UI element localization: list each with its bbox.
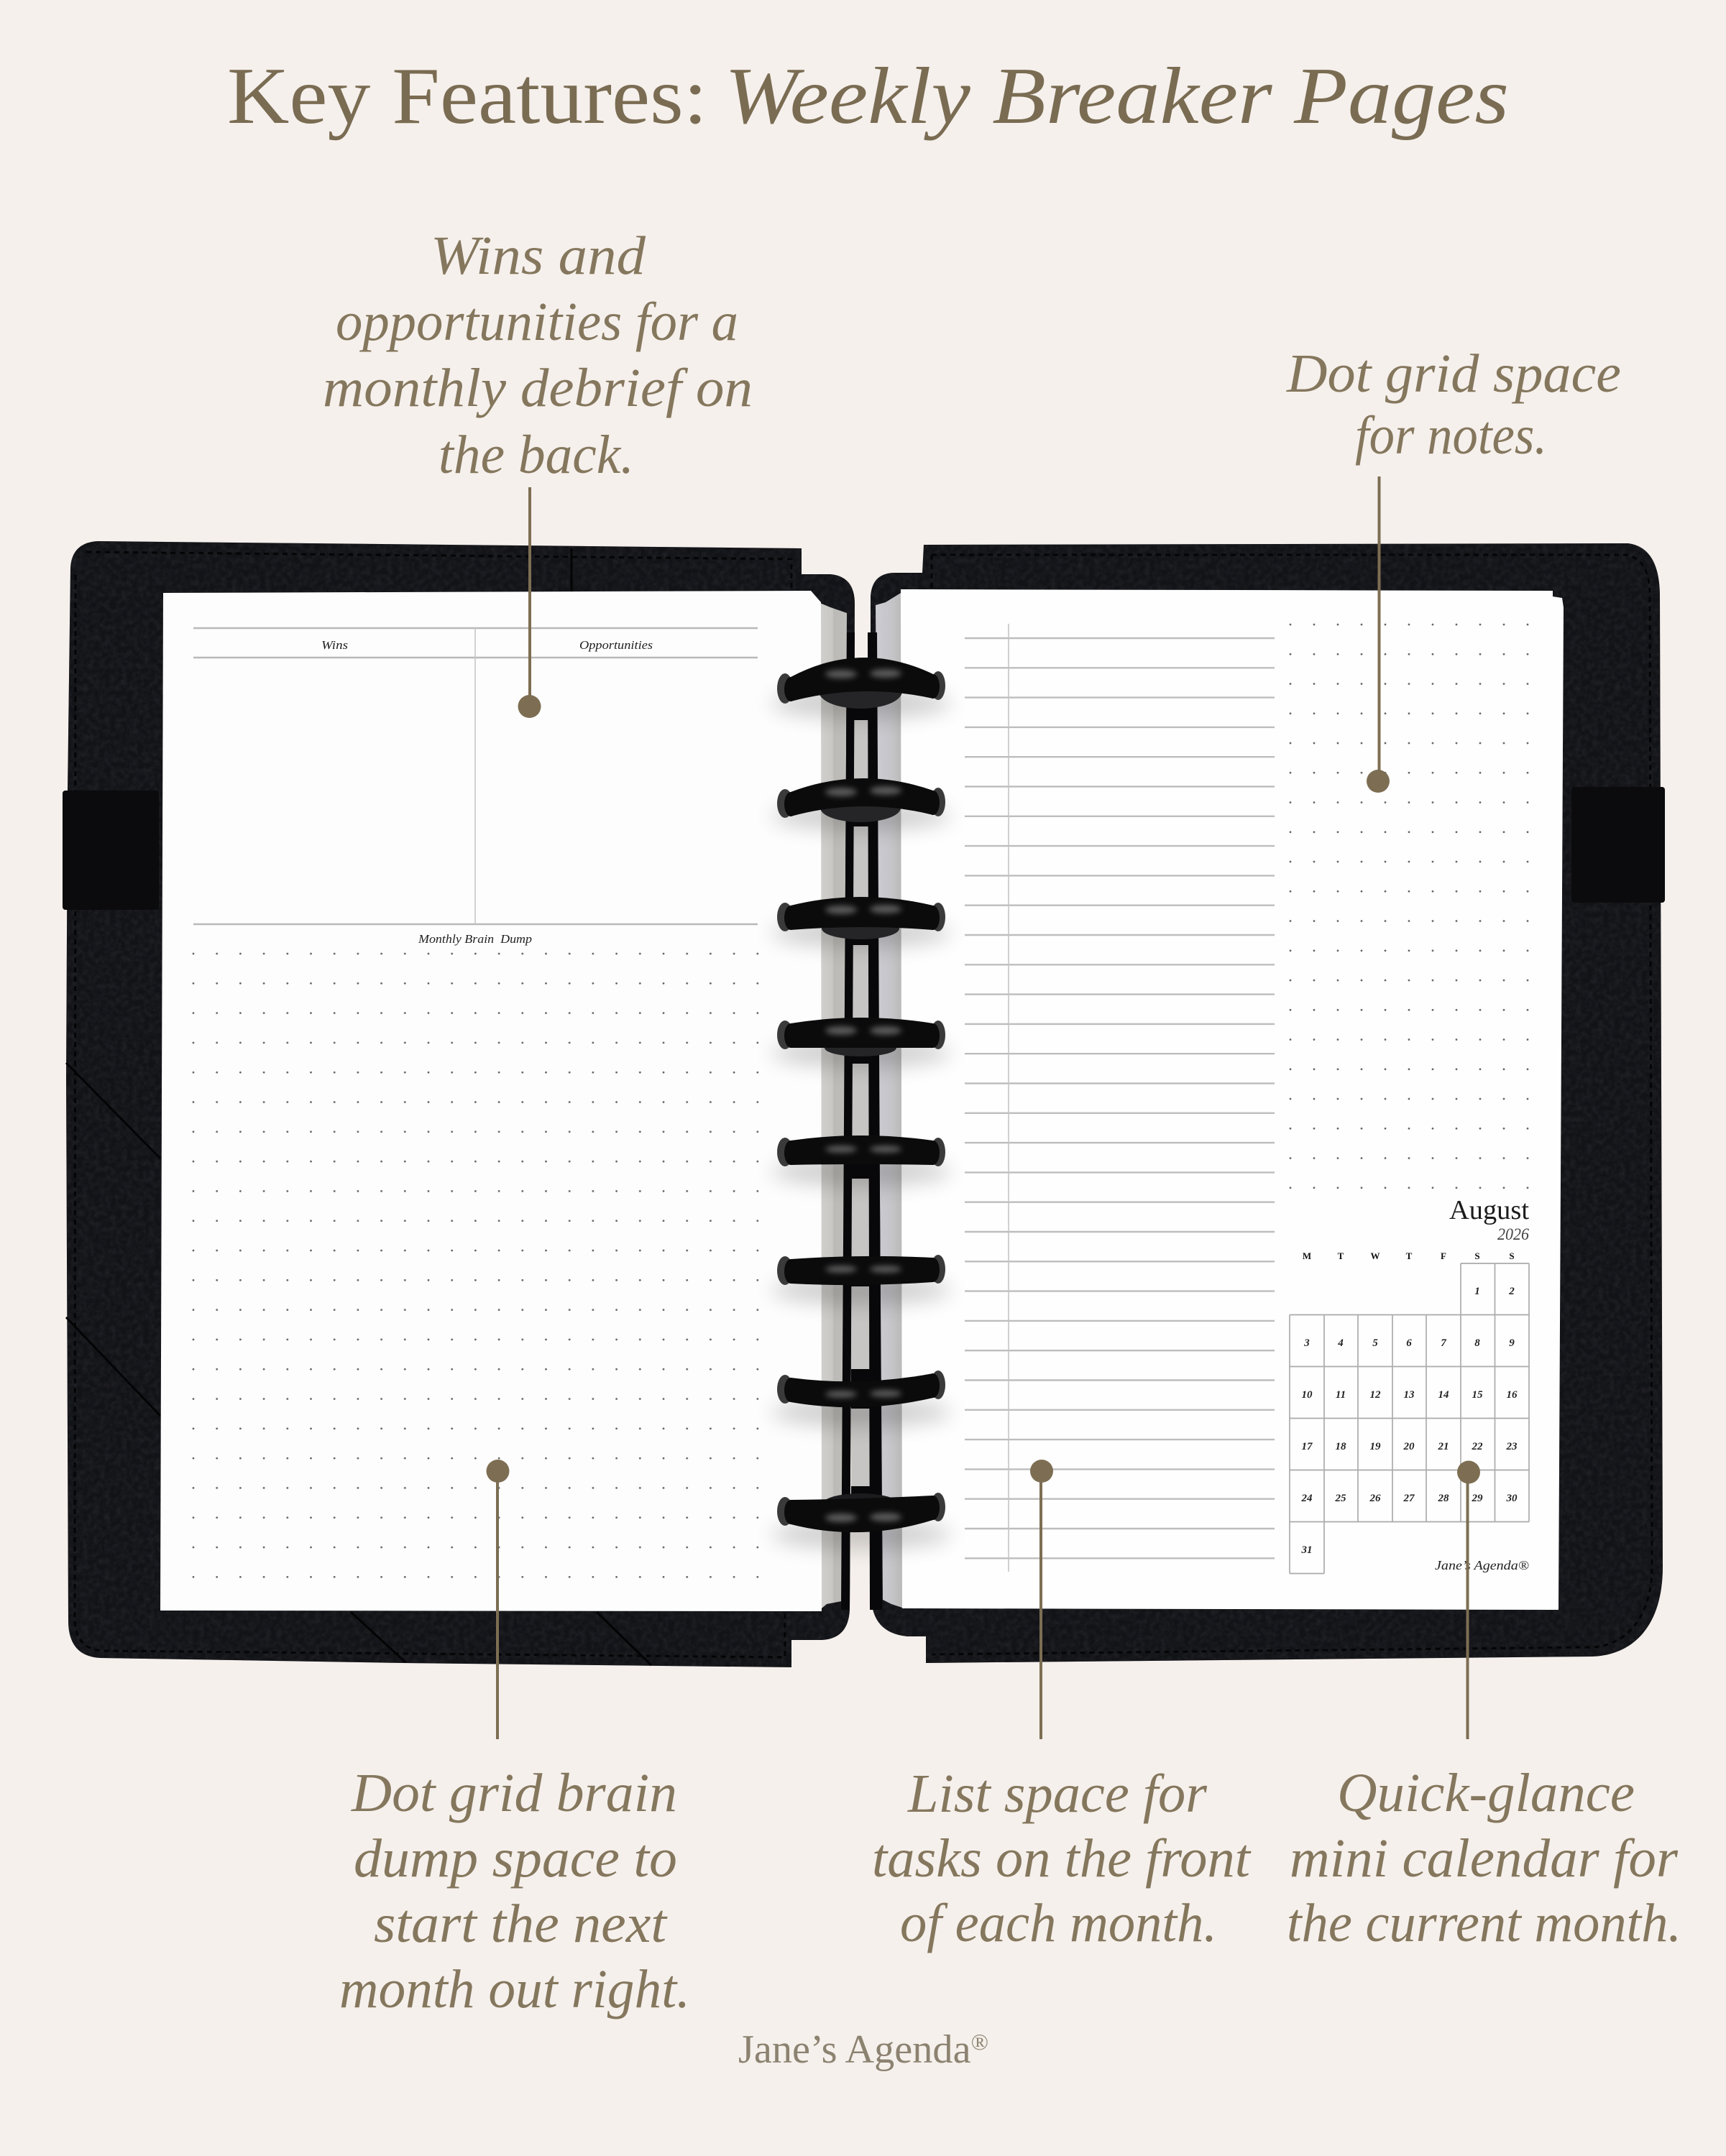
list margin line [1008, 624, 1009, 1572]
footer brand: ® [971, 2029, 988, 2055]
ring 3 [777, 897, 945, 939]
marker dot [1030, 1460, 1053, 1483]
calendar dates: 15 [1472, 1389, 1483, 1401]
callout: list space [872, 1460, 1252, 1953]
right leather cover [871, 543, 1663, 1663]
weekday headers: T [1406, 1250, 1413, 1261]
marker dot [1457, 1460, 1480, 1483]
callout text: Wins and [431, 226, 646, 286]
planner photo [63, 541, 1665, 1667]
weekday headers [1303, 1250, 1515, 1261]
weekday headers: W [1370, 1250, 1380, 1261]
title [227, 52, 1509, 141]
calendar dates: 7 [1441, 1337, 1446, 1349]
mini calendar [1290, 1195, 1529, 1574]
label: monthly brain dump: Monthly Brain Dump [418, 932, 532, 946]
ring 7 [777, 1370, 945, 1407]
calendar dates: 6 [1406, 1337, 1412, 1349]
month heading: August [1449, 1195, 1529, 1225]
calendar dates: 31 [1301, 1544, 1313, 1556]
calendar dates: 17 [1301, 1441, 1313, 1452]
callout text: monthly debrief on [323, 358, 753, 418]
callout text: the back. [439, 425, 634, 485]
dot grid: notes [1278, 609, 1540, 1202]
ring 5 [777, 1135, 945, 1166]
calendar dates: 9 [1509, 1337, 1515, 1349]
callout text: the current month. [1287, 1893, 1681, 1953]
callout text: start the next [374, 1894, 668, 1954]
calendar dates: 23 [1505, 1441, 1518, 1452]
callout text: tasks on the front [872, 1828, 1252, 1889]
callout: wins and opportunities [323, 226, 753, 718]
label: wins: Wins [321, 638, 348, 652]
calendar dates: 29 [1471, 1493, 1483, 1504]
leader line [1039, 1471, 1042, 1739]
calendar dates: 5 [1372, 1337, 1378, 1349]
calendar dates: 25 [1334, 1493, 1346, 1504]
leader line [1466, 1472, 1469, 1739]
callout: mini calendar [1287, 1460, 1681, 1953]
left page [160, 591, 822, 1611]
footer brand: Jane’s Agenda [738, 2027, 970, 2072]
callout text: for notes. [1355, 405, 1547, 466]
right elastic band [1571, 787, 1665, 903]
leader line [496, 1471, 499, 1739]
calendar dates: 28 [1438, 1493, 1449, 1504]
left leather cover [66, 541, 855, 1667]
callout text: of each month. [900, 1893, 1217, 1953]
ring 4 [777, 1018, 945, 1056]
callout text: Quick-glance [1337, 1763, 1635, 1823]
callout text: List space for [907, 1764, 1207, 1824]
page brand mark: Jane’s Agenda® [1435, 1558, 1529, 1572]
callout: brain dump [339, 1460, 690, 2019]
calendar grid [1290, 1263, 1529, 1574]
callout: dot grid notes [1286, 344, 1621, 793]
year: 2026 [1497, 1225, 1529, 1243]
right page stack edge [876, 591, 904, 1608]
calendar dates: 30 [1505, 1493, 1518, 1504]
calendar dates: 19 [1370, 1441, 1381, 1452]
calendar dates: 4 [1337, 1337, 1344, 1349]
weekday headers: F [1441, 1250, 1446, 1261]
calendar dates: 2 [1508, 1286, 1515, 1297]
calendar dates: 20 [1403, 1441, 1415, 1452]
calendar dates: 12 [1370, 1389, 1381, 1401]
title: Weekly Breaker Pages [725, 52, 1509, 141]
callout text: month out right. [339, 1959, 690, 2019]
ring shadows [771, 687, 951, 1549]
calendar dates: 8 [1474, 1337, 1480, 1349]
calendar dates: 26 [1369, 1493, 1381, 1504]
rod cross bars [851, 690, 870, 1531]
weekday headers: S [1474, 1250, 1480, 1261]
calendar dates: 11 [1336, 1389, 1346, 1401]
calendar dates: 16 [1507, 1389, 1518, 1401]
list lines [965, 638, 1275, 1558]
weekday headers: S [1509, 1250, 1515, 1261]
wins and opportunities table [193, 628, 758, 946]
dot grid: brain dump [182, 939, 769, 1592]
callout text [872, 1764, 1252, 1953]
calendar dates: 24 [1301, 1493, 1313, 1504]
discbound rings [777, 658, 945, 1532]
ring 1 [777, 658, 945, 709]
marker dot [1367, 770, 1390, 793]
calendar dates: 1 [1474, 1286, 1480, 1297]
right page [901, 589, 1564, 1610]
left page stack edge [818, 602, 847, 1611]
leader line [1377, 476, 1380, 781]
ring 2 [777, 778, 945, 822]
callout text: Dot grid space [1286, 344, 1621, 404]
label: opportunities: Opportunities [579, 638, 653, 652]
ring 8 [777, 1493, 945, 1532]
weekday headers: T [1338, 1250, 1344, 1261]
weekday headers: M [1303, 1250, 1311, 1261]
callout text [1286, 344, 1621, 466]
callout text [339, 1763, 690, 2019]
spine grey strip [851, 719, 870, 1488]
calendar dates: 22 [1471, 1441, 1483, 1452]
calendar dates: 3 [1303, 1337, 1310, 1349]
left elastic band [63, 791, 159, 910]
calendar dates: 21 [1438, 1441, 1449, 1452]
marker dot [486, 1460, 509, 1483]
marker dot [518, 695, 541, 718]
binding rods [841, 632, 882, 1610]
leader line [528, 487, 531, 706]
ring 6 [777, 1255, 945, 1285]
callout text [1287, 1763, 1681, 1953]
calendar dates: 18 [1336, 1441, 1346, 1452]
calendar dates [1301, 1286, 1518, 1556]
callout text: opportunities for a [336, 292, 738, 352]
callout text [323, 226, 753, 485]
callout text: dump space to [354, 1828, 677, 1889]
title: Key Features: [227, 52, 707, 141]
calendar dates: 13 [1403, 1389, 1415, 1401]
callout text: Dot grid brain [351, 1763, 677, 1823]
calendar dates: 27 [1403, 1493, 1415, 1504]
callout text: mini calendar for [1290, 1828, 1678, 1889]
calendar dates: 14 [1438, 1389, 1449, 1401]
calendar dates: 10 [1301, 1389, 1313, 1401]
